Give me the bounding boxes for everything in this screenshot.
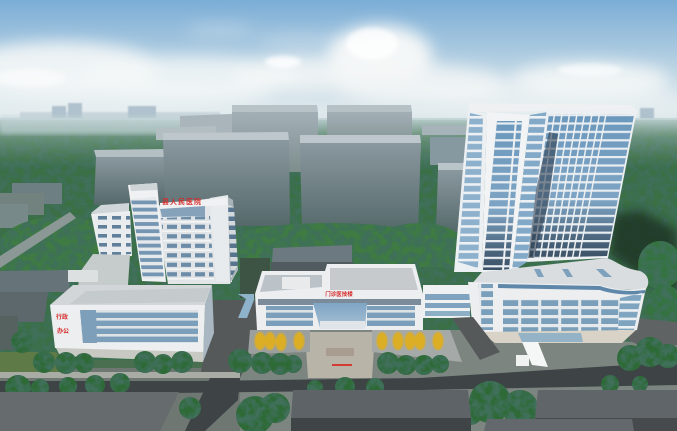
massing block back centre <box>232 105 318 172</box>
podium roof <box>470 258 648 290</box>
tower shadow <box>528 132 558 258</box>
golden ginkgo trees <box>254 332 444 351</box>
tower left balcony face <box>454 110 487 272</box>
green street trees <box>5 331 677 431</box>
ward stair tower <box>128 183 166 282</box>
right forecourt <box>372 330 462 362</box>
roof front centre <box>291 390 471 431</box>
annex roof <box>68 254 130 287</box>
tower mullions <box>534 114 606 258</box>
massing block left small <box>94 149 167 205</box>
tower curved glass <box>512 112 548 272</box>
podium base <box>480 330 636 343</box>
hospital name sign: 县人民医院 <box>162 197 202 206</box>
outpatient facade <box>255 294 423 330</box>
roof front left <box>0 392 179 431</box>
entrance canopy <box>518 333 583 342</box>
foreground dark roofs <box>0 390 677 431</box>
right forest shadow and trees <box>610 210 677 325</box>
ground road and plaza <box>0 317 677 431</box>
tree line behind buildings <box>0 217 460 282</box>
massing blocks right <box>422 125 466 232</box>
podium of tower <box>423 258 648 367</box>
massing block back right <box>327 105 412 152</box>
admin facade <box>50 305 205 362</box>
admin sign lower: 办公 <box>57 327 69 335</box>
ward building with tower <box>91 183 238 284</box>
tower front-left glass face <box>482 112 530 272</box>
admin side <box>203 285 214 362</box>
grey massing blocks <box>0 105 466 232</box>
ward main block <box>155 195 238 284</box>
low dark buildings left <box>0 270 70 350</box>
admin sign: 行政 <box>56 313 68 321</box>
lawn left <box>0 352 70 374</box>
road on left <box>0 212 76 268</box>
roof front right <box>535 390 677 431</box>
administration building <box>50 285 214 362</box>
parking lot <box>628 318 677 348</box>
gate house <box>516 355 529 366</box>
outpatient central atrium glass <box>313 303 367 328</box>
sky with clouds <box>0 0 677 140</box>
main road <box>0 362 677 395</box>
tower main east face <box>527 108 637 262</box>
connector to outpatient <box>423 285 470 318</box>
podium windows <box>503 299 620 332</box>
podium facade <box>468 282 646 333</box>
forest background <box>0 116 677 360</box>
link bridge <box>238 294 254 318</box>
ward west wing <box>91 203 132 258</box>
distant city skyline <box>20 103 677 134</box>
tower roof edge <box>468 103 637 112</box>
massing blocks far left <box>0 183 62 228</box>
outpatient roof <box>255 264 423 294</box>
plaza paving <box>305 332 375 378</box>
massing block back left <box>156 114 232 140</box>
ground plane <box>0 258 677 431</box>
left forecourt <box>248 330 310 354</box>
massing block middle right <box>300 135 421 231</box>
outpatient side glass left <box>266 306 313 326</box>
admin roof <box>50 285 212 305</box>
admin glass <box>80 310 198 343</box>
massing block middle left <box>163 132 290 226</box>
admin roof edge <box>70 288 210 304</box>
white ramp <box>522 342 548 367</box>
high-rise inpatient tower <box>454 103 637 272</box>
outpatient sign: 门诊医技楼 <box>325 290 353 298</box>
grey building behind podium <box>271 245 353 272</box>
roof front middle low <box>484 419 634 431</box>
outpatient side glass right <box>367 306 415 326</box>
outpatient building <box>255 264 423 330</box>
